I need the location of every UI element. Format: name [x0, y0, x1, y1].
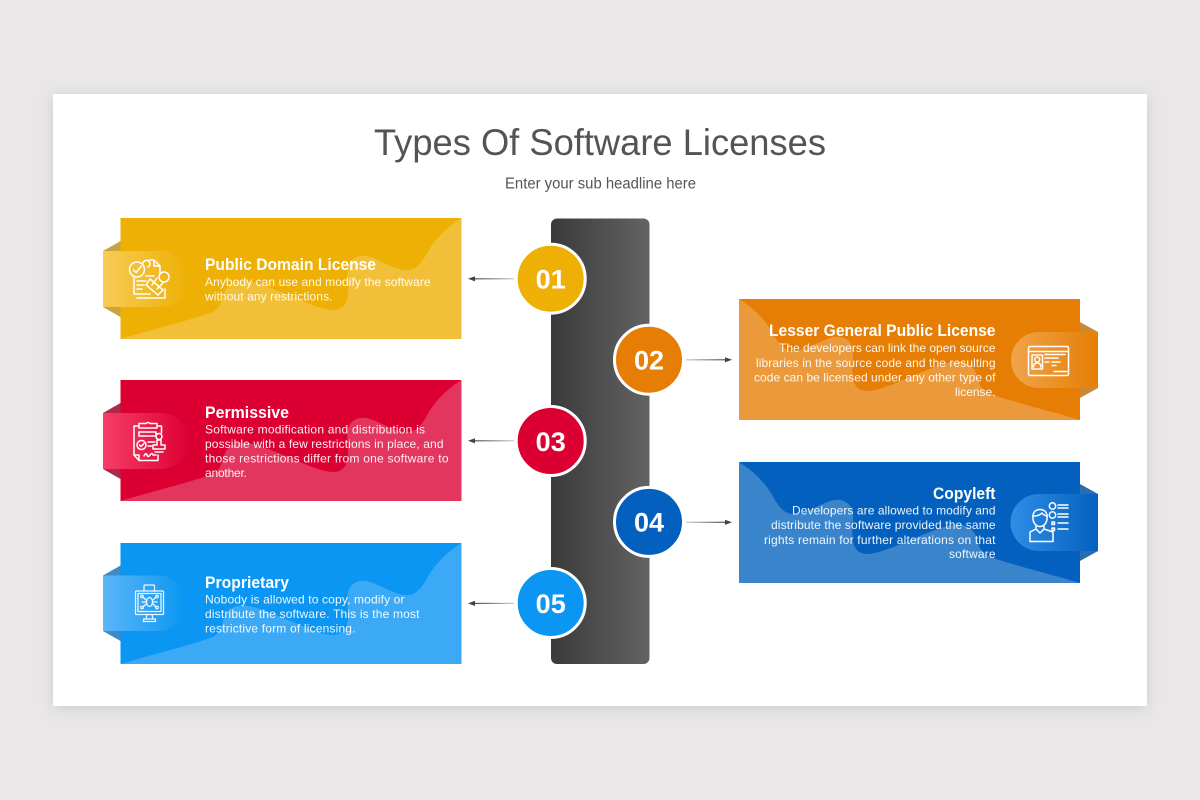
icon: document with stamp — [130, 260, 169, 298]
central dark bar — [551, 218, 650, 664]
arrow: 04 to panel — [686, 520, 732, 525]
description: possible with a few restrictions in place, and — [205, 437, 444, 451]
description — [205, 422, 449, 480]
description: license. — [955, 385, 996, 399]
panel: 02 Lesser General Public License — [739, 299, 1098, 420]
description — [764, 504, 996, 561]
number badge 02 — [614, 325, 684, 394]
subtitle: Enter your sub headline here — [505, 176, 696, 192]
panel: 05 Proprietary — [103, 543, 462, 664]
description: without any restrictions. — [204, 290, 332, 304]
white slide panel — [53, 94, 1147, 706]
icon: clipboard with stamp — [134, 423, 165, 460]
icon: person with checklist — [1030, 503, 1068, 542]
panel: 01 Public Domain License — [103, 218, 462, 339]
description: Software modification and distribution is — [205, 422, 425, 436]
description — [205, 592, 420, 636]
number badge 03 — [516, 406, 585, 476]
number badge 04: 04 — [634, 508, 664, 538]
description: rights remain for further alterations on that — [764, 533, 996, 547]
number badge 01 — [516, 244, 585, 313]
arrow: 01 to panel — [468, 276, 514, 281]
number badge 05: 05 — [536, 589, 566, 619]
description: distribute the software. This is the most — [205, 607, 420, 621]
panel: 03 Permissive — [103, 380, 462, 501]
arrow: 02 to panel — [686, 357, 732, 362]
description: another. — [205, 466, 247, 480]
heading: Lesser General Public License — [769, 322, 996, 340]
title: Types Of Software Licenses — [374, 122, 826, 163]
description: those restrictions differ from one software to — [205, 452, 449, 466]
description: Anybody can use and modify the software — [205, 275, 431, 289]
description: restrictive form of licensing. — [205, 622, 356, 636]
heading: Copyleft — [933, 485, 996, 503]
icon: monitor with circuit bug — [136, 585, 164, 622]
icon: ID card — [1028, 346, 1068, 376]
description: Nobody is allowed to copy, modify or — [205, 592, 404, 606]
number badge 04 — [614, 487, 684, 556]
description: libraries in the source code and the resulting — [756, 356, 996, 370]
number badge 05 — [516, 568, 585, 638]
number badge 01: 01 — [536, 264, 566, 294]
number badge 02: 02 — [634, 346, 664, 376]
number badge 03: 03 — [536, 427, 566, 457]
description: code can be licensed under any other type of — [754, 370, 996, 384]
description: distribute the software provided the same — [771, 518, 996, 532]
heading: Proprietary — [205, 574, 290, 592]
description: Developers are allowed to modify and — [792, 504, 996, 518]
heading: Public Domain License — [205, 256, 376, 274]
description: The developers can link the open source — [779, 341, 996, 355]
heading: Permissive — [205, 404, 289, 422]
panel: 04 Copyleft — [739, 462, 1098, 583]
description: software — [949, 547, 996, 561]
description — [754, 341, 996, 399]
arrow: 03 to panel — [468, 438, 514, 443]
arrow: 05 to panel — [468, 601, 514, 606]
description — [204, 275, 431, 304]
